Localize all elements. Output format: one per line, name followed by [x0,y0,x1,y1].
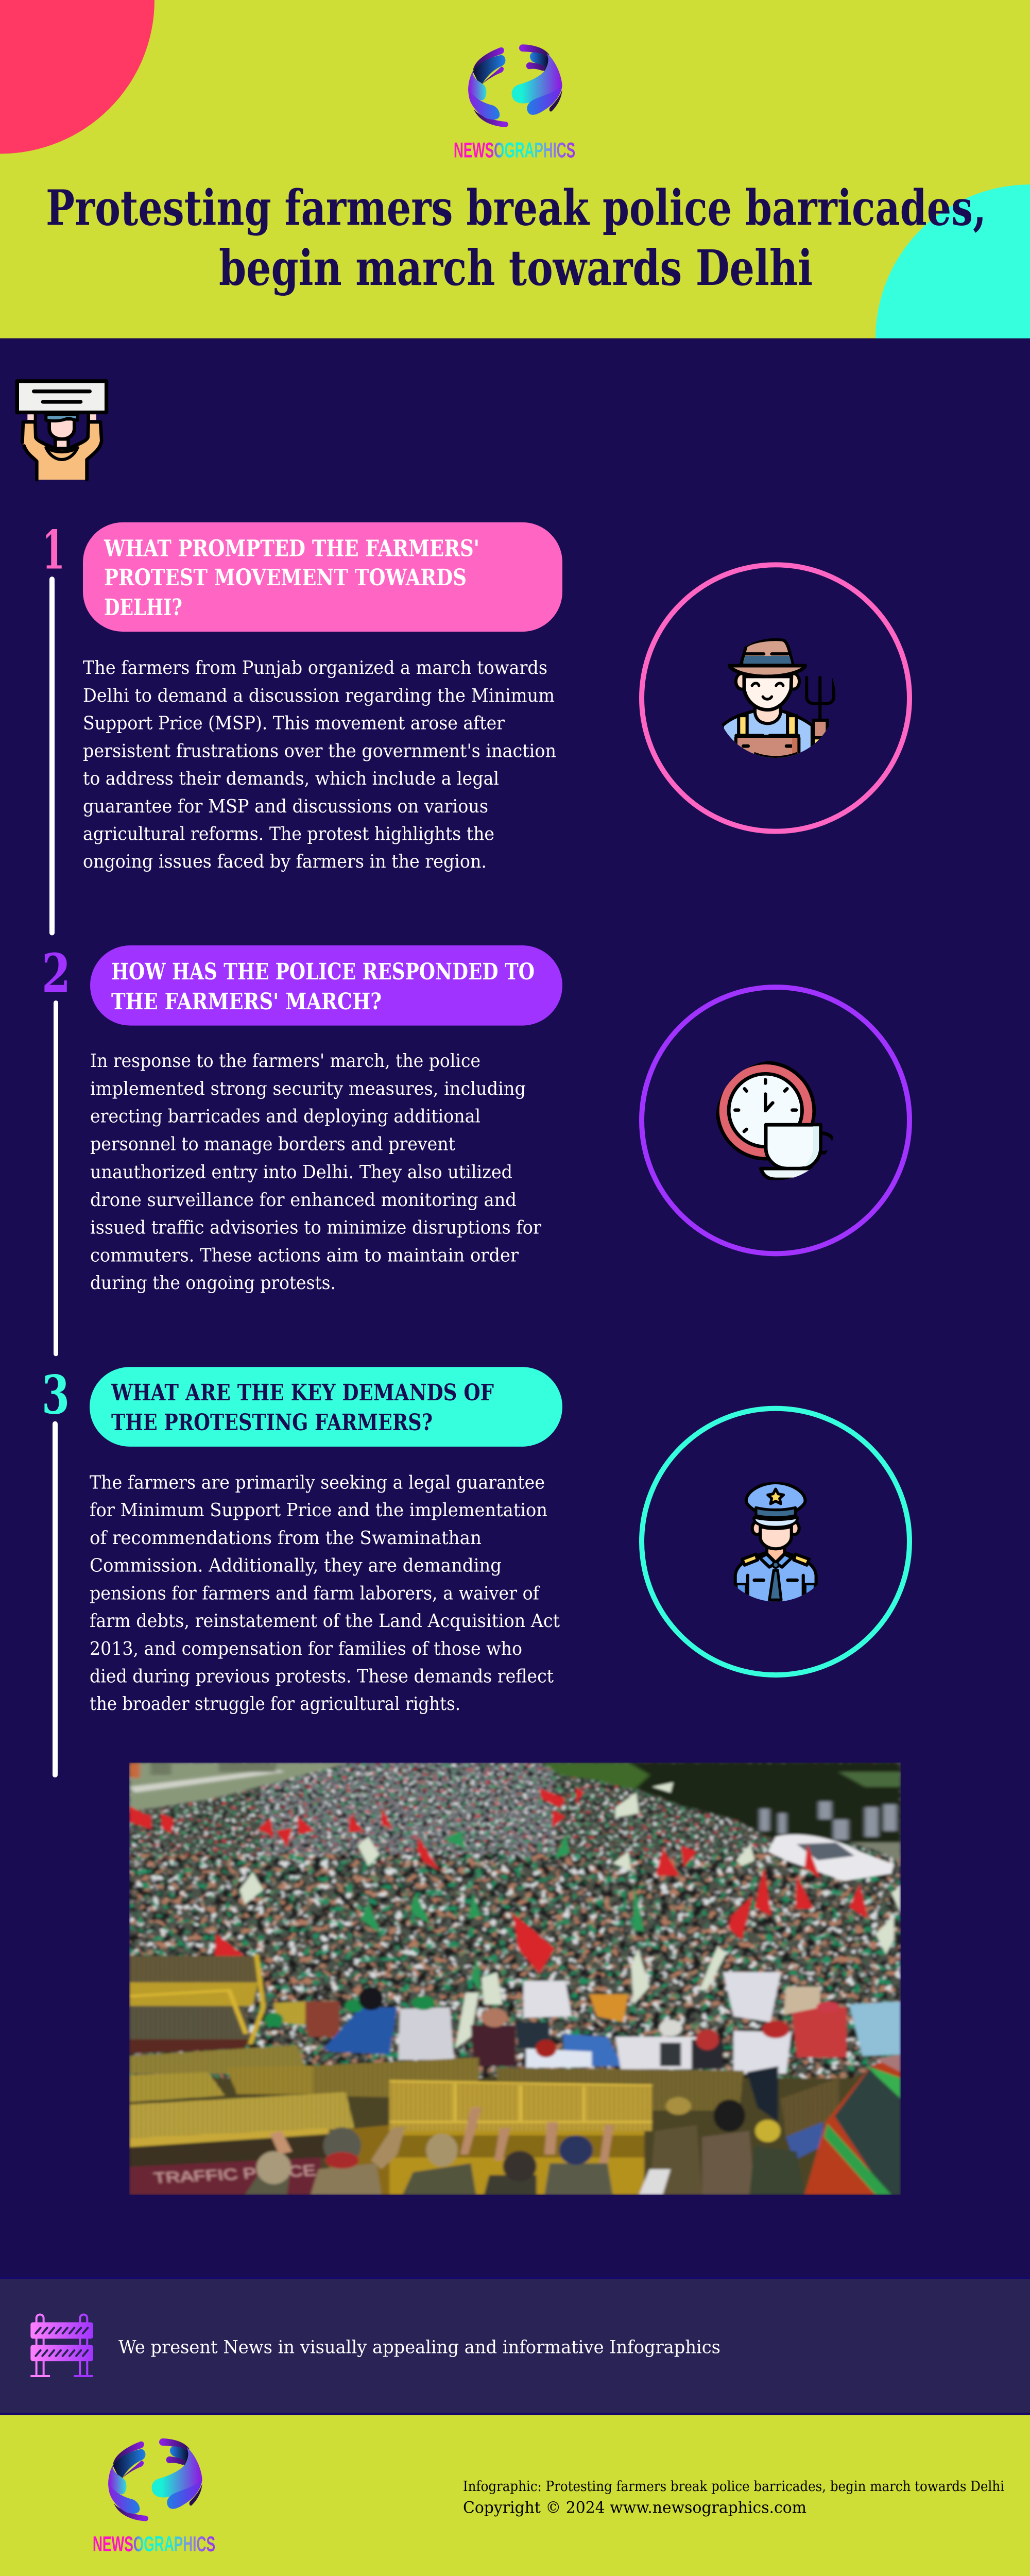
logo: NEWSOGRAPHICS [454,138,575,162]
body text 1: guarantee for MSP and discussions on various [83,796,488,817]
white car [768,1835,894,1881]
green vehicle at right [804,2055,901,2195]
icon: road barrier [30,2314,93,2377]
body text 2: unauthorized entry into Delhi. They also utilized [90,1162,512,1183]
body text 2: commuters. These actions aim to maintain order [90,1245,519,1266]
ring 3 [642,1409,909,1675]
icon: farmer [723,639,834,762]
heading pill 3 [90,1367,562,1447]
body text 2: drone surveillance for enhanced monitoring and [90,1190,517,1211]
timeline bar 3 [53,1421,58,1777]
heading pill 1: WHAT PROMPTED THE FARMERS' [104,535,479,562]
police officers [245,2097,804,2195]
body text 2: issued traffic advisories to minimize disruptions for [90,1217,542,1239]
heading pill 1: PROTEST MOVEMENT TOWARDS [104,565,467,591]
body text 2 [90,1050,542,1294]
front row protesters [264,1972,901,2122]
body text 2: during the ongoing protests. [90,1273,336,1294]
timeline bar 2 [54,1001,58,1356]
heading pill 2: HOW HAS THE POLICE RESPONDED TO [111,959,535,985]
body text 2: implemented strong security measures, including [90,1078,526,1099]
footer logo: NEWSOGRAPHICS [93,2532,215,2556]
trees top right [539,1762,901,1862]
photo: farmers pushing against police barricades [129,1762,901,2195]
body text 1: Delhi to demand a discussion regarding the Minimum [83,685,555,706]
body text 3: The farmers are primarily seeking a legal guarantee [90,1472,545,1493]
body text 1: agricultural reforms. The protest highlights the [83,824,494,844]
footer credit text [463,2479,1004,2517]
body text 3: the broader struggle for agricultural rights. [90,1693,460,1715]
number 1: 1 [42,519,65,581]
landscape top left [129,1762,350,1812]
body text 1 [83,657,556,872]
panel: question 3 [42,1364,909,1777]
panel: question 2 [42,942,909,1356]
heading pill 2: THE FARMERS' MARCH? [111,989,382,1015]
body text 3: for Minimum Support Price and the implementation [90,1500,547,1521]
footer panel [0,2415,1030,2576]
number 3: 3 [42,1364,70,1427]
body text 3: farm debts, reinstatement of the Land Acquisition Act [90,1611,560,1632]
body text 3: died during previous protests. These demands reflect [90,1666,554,1687]
heading pill 1: DELHI? [104,595,182,621]
heading pill 1 [83,522,562,632]
tagline band [0,2277,1030,2415]
flags [129,1787,868,1974]
body text 2: personnel to manage borders and prevent [90,1133,456,1155]
number 2: 2 [42,942,71,1005]
photo base so no gaps show [129,2073,863,2194]
body text 1: persistent frustrations over the government's inaction [83,740,556,761]
icon: clock and coffee cup [717,1063,834,1179]
panel: question 1 [42,519,909,936]
icon: protester holding sign [17,381,107,480]
footer credit text: Copyright © 2024 www.newsographics.com [463,2499,806,2517]
timeline bar 1 [49,577,55,936]
body text 2: In response to the farmers' march, the police [90,1050,480,1072]
decorative red quarter circle [0,0,154,154]
body text 3 [90,1472,560,1715]
title: begin march towards Delhi [219,240,813,297]
body text 3: of recommendations from the Swaminathan [90,1528,482,1549]
ring 2 [642,987,909,1253]
body text 3: pensions for farmers and farm laborers, a waiver of [90,1583,541,1604]
ring 1 [642,565,909,832]
text on traffic police barricade: TRAFFIC POLICE [152,2162,317,2187]
body text 2: erecting barricades and deploying additional [90,1106,480,1127]
body text 3: Commission. Additionally, they are demanding [90,1555,502,1577]
body text 1: The farmers from Punjab organized a march towards [83,657,547,679]
heading pill 2 [90,945,562,1026]
crowd base [129,1762,901,2075]
barricades [129,1955,839,2195]
decorative cyan quarter circle [876,184,1030,338]
icon: police officer [735,1483,816,1603]
body text 3: 2013, and compensation for families of those who [90,1638,522,1659]
tagline text: We present News in visually appealing and informative Infographics [118,2337,720,2358]
body text 1: to address their demands, which include a legal [83,768,499,789]
footer logo [93,2438,215,2556]
heading pill 3: THE PROTESTING FARMERS? [111,1410,433,1436]
body text 1: ongoing issues faced by farmers in the region. [83,851,487,872]
body text 1: Support Price (MSP). This movement arose after [83,713,505,734]
heading pill 3: WHAT ARE THE KEY DEMANDS OF [111,1380,494,1406]
logo [454,44,575,162]
header panel [0,0,1030,338]
title [46,180,986,297]
